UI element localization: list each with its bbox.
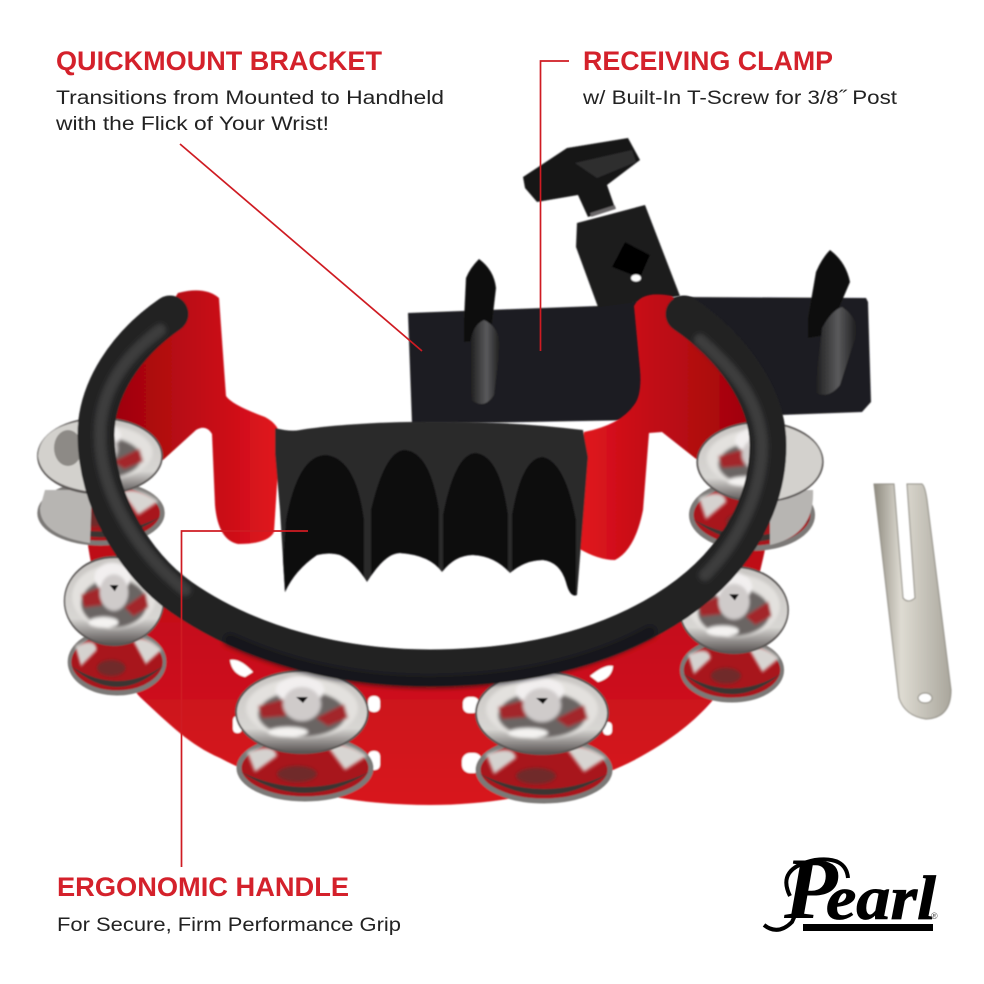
jingle pair: top right <box>691 422 823 548</box>
clamp square hole <box>612 242 650 278</box>
heading: RECEIVING CLAMP <box>583 46 833 76</box>
jingle pair: middle right <box>680 567 788 700</box>
jingle pair: top left <box>38 418 162 543</box>
right wing <box>578 294 760 560</box>
photo: tambourine hoop and jingles <box>38 290 823 805</box>
callout line: receiving clamp <box>540 61 569 351</box>
description: For Secure, Firm Performance Grip <box>57 915 401 936</box>
hoop slots <box>230 660 613 773</box>
pegs <box>464 259 496 342</box>
callout line: ergonomic handle <box>182 531 308 867</box>
clamp block <box>576 205 680 307</box>
grip handle <box>275 422 588 600</box>
jingle pair: bottom right <box>476 672 610 801</box>
left wing <box>110 290 280 544</box>
grip finger ridges <box>280 450 576 600</box>
T-screw <box>523 138 640 217</box>
heading: ERGONOMIC HANDLE <box>57 872 349 902</box>
red hoop <box>85 500 767 805</box>
jingle pair: bottom left <box>236 671 371 799</box>
callout text: receiving clamp <box>582 46 898 109</box>
description: Transitions from Mounted to Handheld <box>56 88 444 109</box>
description: w/ Built-In T-Screw for 3/8˝ Post <box>582 88 898 109</box>
callout line: quickmount bracket <box>180 144 422 351</box>
Pearl logo: P <box>783 841 839 938</box>
heading: QUICKMOUNT BRACKET <box>56 46 383 76</box>
photo: metal fork key <box>874 484 951 719</box>
mounting plate <box>408 297 871 424</box>
Pearl logo: earl <box>826 865 937 933</box>
description: with the Flick of Your Wrist! <box>55 114 329 135</box>
description <box>55 88 444 135</box>
black rubber rim <box>96 314 768 682</box>
callout text: ergonomic handle <box>57 872 401 936</box>
Pearl logo: ® <box>931 911 938 921</box>
callout text: quickmount bracket <box>55 46 444 135</box>
jingle pair: middle left <box>64 557 165 693</box>
Pearl logo <box>764 841 938 938</box>
photo: receiving clamp bracket <box>408 138 871 424</box>
